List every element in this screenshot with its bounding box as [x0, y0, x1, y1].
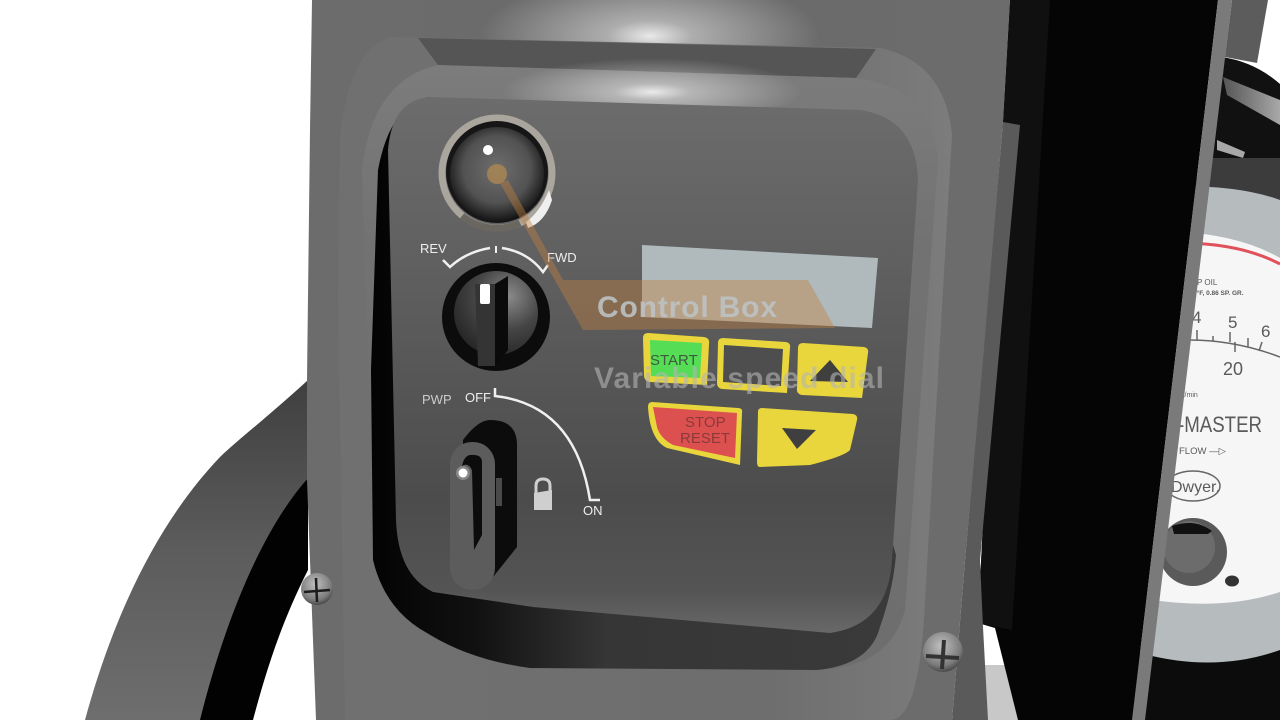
gauge scale and labels: 4: [1192, 308, 1201, 327]
direction switch REV FWD: REV: [420, 241, 447, 256]
callout: control box leader and label: [487, 164, 884, 395]
blank button: [717, 338, 790, 393]
gauge scale and labels: 20: [1223, 359, 1243, 379]
direction switch REV FWD: [420, 241, 577, 371]
direction switch REV FWD: FWD: [547, 250, 577, 265]
gauge scale and labels: 6: [1261, 322, 1270, 341]
pump switch PWP OFF ON: [422, 388, 602, 590]
display window: [642, 245, 878, 328]
gauge scale and labels: [1171, 278, 1270, 496]
icon: screw right: [923, 632, 963, 672]
keypad: [643, 333, 868, 467]
pump switch PWP OFF ON: ON: [583, 503, 602, 518]
down button: [757, 408, 857, 467]
control face plate: [388, 97, 918, 633]
stop reset button: RESET: [680, 430, 730, 447]
motor housing behind gauge: [1190, 0, 1280, 210]
gauge scale and labels: Dwyer.: [1171, 479, 1220, 496]
stop reset button: [648, 402, 742, 465]
callout: control box leader and label: Variable speed dial: [594, 362, 884, 395]
grey enclosure panel: [307, 0, 1010, 720]
gauge scale and labels: -MASTER: [1178, 412, 1262, 437]
callout: control box leader and label: Control Box: [597, 291, 777, 324]
icon: screw left: [301, 573, 333, 605]
control box bezel: [338, 37, 952, 720]
gauge scale and labels: FLOW —▷: [1179, 446, 1227, 457]
pump switch PWP OFF ON: OFF: [465, 390, 491, 405]
gauge scale and labels: l/min: [1183, 392, 1198, 399]
icon: padlock: [534, 479, 552, 510]
gauge scale and labels: 3°F, 0.86 SP. GR.: [1193, 289, 1244, 297]
floor behind bracket: [985, 620, 1040, 720]
black bracket: [978, 0, 1232, 720]
stop reset button: STOP: [685, 414, 726, 431]
icon: variable speed dial: [442, 118, 552, 228]
pump switch PWP OFF ON: PWP: [422, 392, 452, 407]
gauge scale and labels: P OIL: [1197, 278, 1218, 287]
start button: START: [650, 352, 698, 369]
flow meter gauge: [1120, 186, 1280, 720]
gauge scale and labels: 5: [1228, 313, 1237, 332]
up button: [797, 343, 868, 398]
start button: [643, 333, 709, 385]
curved support arm: [85, 380, 308, 720]
enclosure side strip: [952, 122, 1020, 720]
